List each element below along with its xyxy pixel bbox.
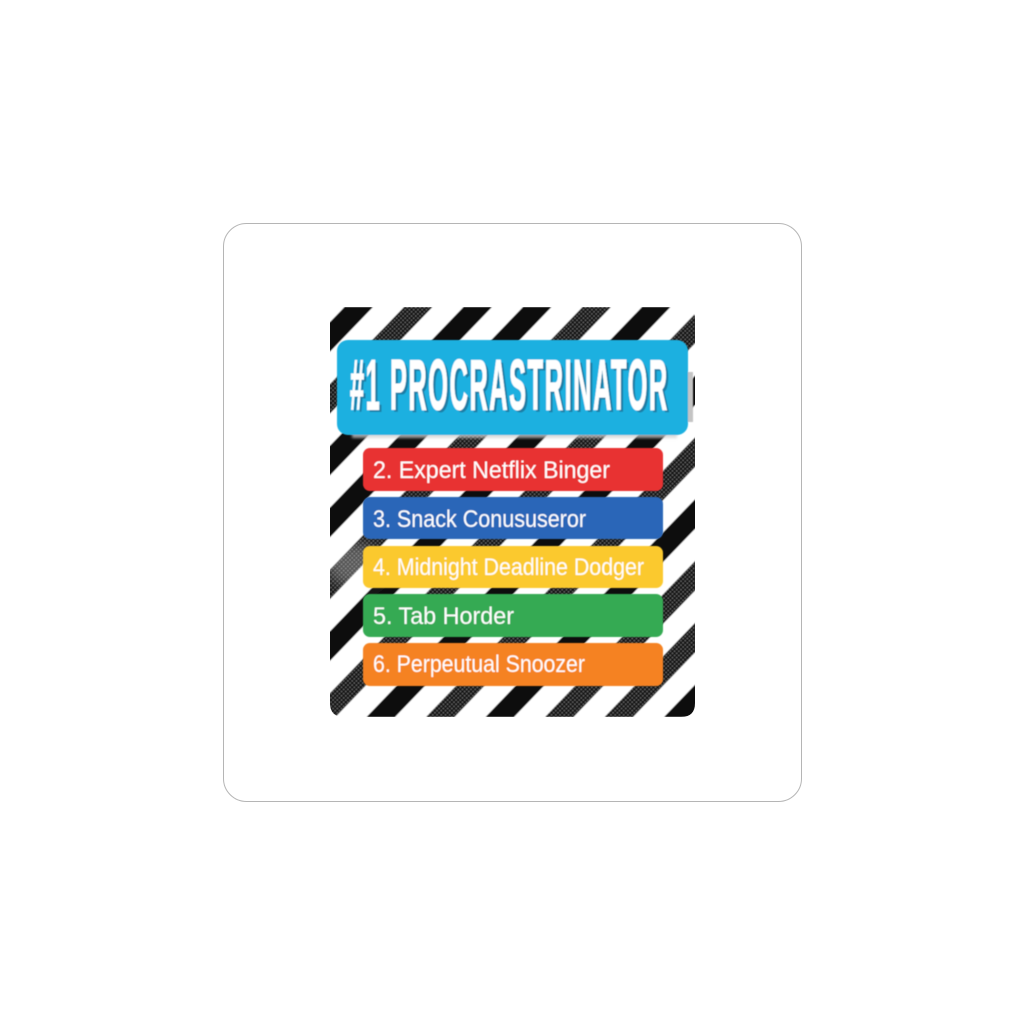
list row 5: Tab Horder — [363, 594, 663, 637]
list row 4: Midnight Deadline Dodger — [363, 546, 663, 588]
list row 3: Snack Conususeror: 3. Snack Conususeror — [373, 506, 586, 533]
list row 2: Expert Netflix Binger — [363, 448, 663, 491]
list row 6: Perpeutual Snoozer: 6. Perpeutual Snoozer — [373, 651, 585, 678]
sticker card outline — [224, 224, 802, 802]
list row 3: Snack Conususeror — [363, 497, 663, 539]
list row 2: Expert Netflix Binger: 2. Expert Netflix Binger — [373, 457, 610, 484]
title banner: #1 PROCRASTRINATOR — [350, 347, 669, 425]
list row 5: Tab Horder: 5. Tab Horder — [373, 603, 514, 630]
panel: hazard stripe background — [330, 307, 695, 717]
list row 4: Midnight Deadline Dodger: 4. Midnight Deadline Dodger — [373, 554, 644, 581]
list row 6: Perpeutual Snoozer — [363, 643, 663, 686]
title banner: #1 PROCRASTRINATOR — [352, 349, 671, 428]
